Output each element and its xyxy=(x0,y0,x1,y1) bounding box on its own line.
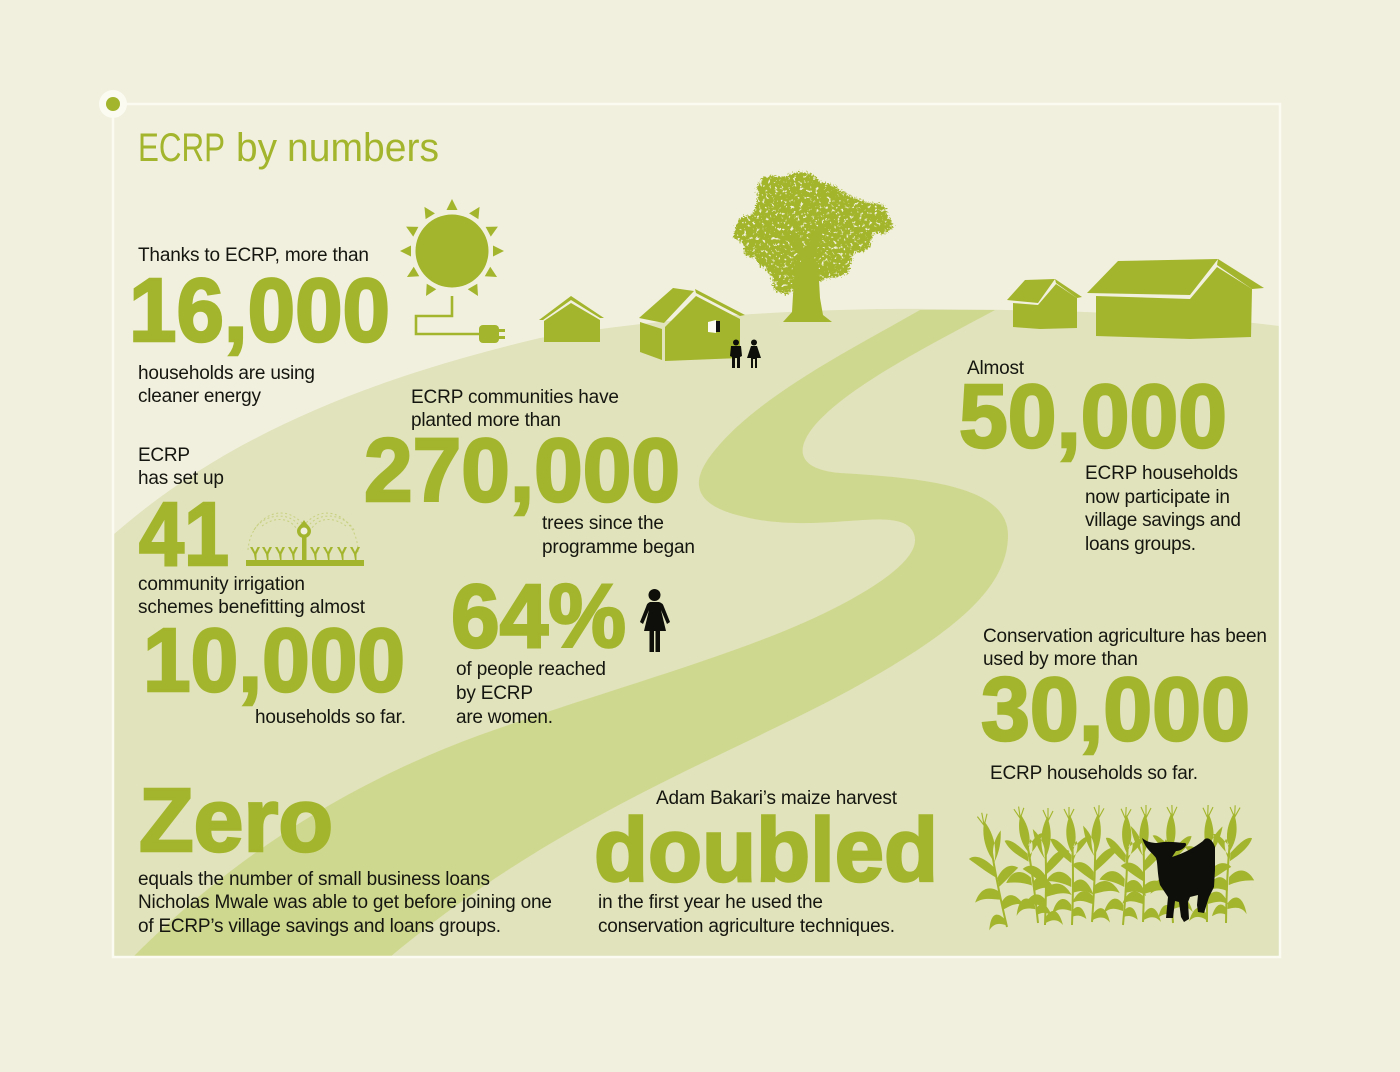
title: by xyxy=(236,126,277,170)
title: numbers xyxy=(287,126,439,170)
panel: irrigation: households so far. xyxy=(255,707,406,728)
stat: 16,000: 16,000 xyxy=(129,261,390,361)
icon: small farm house xyxy=(1007,279,1082,329)
icon: goat xyxy=(1142,838,1215,922)
winding road xyxy=(133,310,1008,957)
panel: clean energy: households are using xyxy=(138,363,315,384)
panel: conservation agriculture: ECRP households so far. xyxy=(990,763,1198,784)
panel: savings groups: Almost xyxy=(967,358,1025,379)
panel: conservation agriculture xyxy=(981,626,1267,784)
icon: irrigation sprinkler xyxy=(246,513,364,566)
panel: trees planted: trees since the xyxy=(542,513,664,534)
panel: conservation agriculture: used by more than xyxy=(983,649,1138,670)
hillside xyxy=(113,309,1280,957)
stat: 270,000: 270,000 xyxy=(364,421,680,521)
panel: zero loans: equals the number of small business loans xyxy=(138,869,490,890)
stat: doubled: doubled xyxy=(594,801,938,901)
frame xyxy=(113,104,1280,957)
panel: doubled harvest: conservation agriculture techniques. xyxy=(598,916,895,937)
panel: doubled harvest: in the first year he used the xyxy=(598,892,823,913)
panel: women reached: of people reached xyxy=(456,659,606,680)
panel: trees planted: ECRP communities have xyxy=(411,387,619,408)
panel: women reached: by ECRP xyxy=(456,683,533,704)
panel: irrigation: ECRP xyxy=(138,445,190,466)
icon: couple xyxy=(730,340,761,368)
panel: trees planted: planted more than xyxy=(411,410,561,431)
panel: savings groups: village savings and xyxy=(1085,510,1241,531)
stat: 50,000: 50,000 xyxy=(959,367,1227,467)
panel: clean energy xyxy=(129,245,390,407)
stat: 41: 41 xyxy=(139,485,229,585)
stat: Zero: Zero xyxy=(139,771,333,871)
panel: savings groups: loans groups. xyxy=(1085,534,1196,555)
panel: doubled harvest: Adam Bakari’s maize harvest xyxy=(656,788,898,809)
icon: woman xyxy=(640,589,670,652)
panel: irrigation: schemes benefitting almost xyxy=(138,597,366,618)
panel: irrigation: community irrigation xyxy=(138,574,305,595)
icon: maize plants xyxy=(959,803,1258,932)
icon: sun with power plug xyxy=(400,199,505,343)
icon: tree xyxy=(730,175,890,322)
panel: zero loans: Nicholas Mwale was able to get before joining one xyxy=(138,892,552,913)
panel: clean energy: cleaner energy xyxy=(138,386,262,407)
icon: large farm house xyxy=(1087,259,1264,339)
panel: savings groups xyxy=(959,358,1241,555)
stat: 64%: 64% xyxy=(451,567,626,667)
panel: savings groups: now participate in xyxy=(1085,487,1230,508)
frame corner marker xyxy=(99,90,127,118)
title xyxy=(138,126,439,170)
stat: 30,000: 30,000 xyxy=(981,660,1250,760)
icon: small house xyxy=(539,296,604,342)
panel: doubled harvest xyxy=(594,788,938,937)
icon: house with window xyxy=(639,288,745,361)
panel: clean energy: Thanks to ECRP, more than xyxy=(138,245,369,266)
panel: zero loans xyxy=(138,771,552,937)
panel: women reached xyxy=(451,567,626,728)
panel: zero loans: of ECRP’s village savings and loans groups. xyxy=(138,916,501,937)
stat: 10,000: 10,000 xyxy=(143,611,405,711)
panel: trees planted: programme began xyxy=(542,537,695,558)
panel: irrigation: has set up xyxy=(138,468,224,489)
panel: irrigation xyxy=(138,445,406,728)
panel: women reached: are women. xyxy=(456,707,553,728)
panel: trees planted xyxy=(364,387,695,558)
panel: conservation agriculture: Conservation agriculture has been xyxy=(983,626,1267,647)
title: ECRP xyxy=(138,126,225,170)
panel: savings groups: ECRP households xyxy=(1085,463,1238,484)
